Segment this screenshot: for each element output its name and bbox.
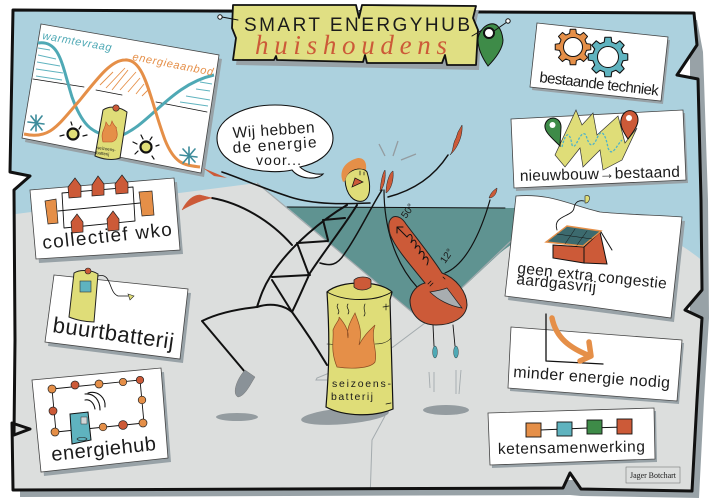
shoe — [235, 370, 255, 397]
icon: house with solar panels — [546, 195, 612, 264]
icon: red pin — [621, 111, 638, 139]
ground shadows — [216, 404, 469, 428]
subtitle text: huishoudens — [255, 30, 447, 60]
left arm and hands — [182, 168, 370, 245]
icon: folded map — [555, 110, 637, 170]
legs — [433, 325, 455, 346]
network of nodes — [48, 376, 147, 436]
logo: Jager Botchart — [626, 467, 680, 483]
label: collectief wko — [41, 219, 173, 254]
legs — [202, 305, 327, 372]
panel: ketensamenwerking — [488, 408, 657, 468]
thermometer character — [384, 188, 497, 394]
houses — [68, 175, 128, 233]
panel: geen extra congestie — [505, 195, 685, 322]
arms — [384, 190, 490, 287]
icon: falling arrow chart — [546, 314, 603, 364]
excitement ticks — [379, 141, 416, 160]
heat storage blocks — [45, 191, 154, 224]
icon: small battery: batterij — [96, 150, 110, 157]
speech bubble: voor... — [256, 152, 301, 168]
right arms — [320, 155, 448, 265]
chart axis lines — [33, 79, 207, 112]
hatched surplus area — [100, 68, 148, 96]
supply curve — [24, 60, 200, 167]
red hands — [380, 125, 462, 193]
chain of coloured squares — [526, 419, 632, 437]
icon: small battery: seizoens- — [97, 145, 117, 153]
figure: person as power pylon — [182, 125, 462, 397]
eyes — [428, 277, 445, 286]
speech bubble — [217, 105, 333, 178]
label: bestaande techniek — [539, 69, 660, 100]
panel: nieuwbouw bestaand — [511, 110, 688, 191]
seasonal battery: batterij — [331, 391, 373, 403]
label: energiehub — [50, 433, 157, 466]
thermometer character: 12° — [438, 247, 456, 266]
icon: green pin — [545, 118, 561, 146]
pylon body — [257, 205, 357, 312]
label line 2: aardgasvrij — [516, 271, 597, 296]
icon: suns — [60, 122, 159, 159]
seasonal battery — [326, 277, 393, 415]
motion lines — [429, 370, 461, 394]
icon: neighbourhood battery — [69, 268, 134, 322]
label: energieaanbod: energieaanbod — [131, 51, 215, 79]
pin: title left hook — [218, 15, 238, 20]
coil and arrow — [397, 227, 428, 265]
flame — [333, 313, 376, 368]
battery label: seizoens- — [332, 378, 392, 390]
panel: buurtbatterij — [45, 268, 191, 363]
speech bubble: de energie — [232, 134, 317, 157]
label: ketensamenwerking — [498, 438, 645, 458]
temperature labels: 50° — [399, 202, 417, 221]
icon: orange gear — [555, 29, 591, 65]
panel: collectief wko — [30, 175, 183, 263]
battery cap — [354, 277, 371, 290]
icon: hub device — [70, 392, 105, 444]
icon: small battery — [95, 105, 127, 159]
label: nieuwbouw→bestaand — [520, 164, 680, 185]
demand curve — [38, 43, 214, 136]
network lines — [58, 187, 140, 228]
label: warmtevraag: warmtevraag — [41, 30, 113, 54]
label: minder energie nodig — [513, 364, 671, 392]
panel: energy chart — [22, 24, 222, 177]
title text: SMART ENERGYHUB — [244, 15, 470, 36]
icon: teal gear — [588, 37, 628, 77]
label: buurtbatterij — [51, 312, 176, 354]
icon: snowflakes — [28, 115, 197, 164]
body — [389, 216, 467, 325]
heat marks — [337, 304, 391, 404]
panel: energiehub — [32, 368, 171, 476]
head — [341, 158, 370, 201]
icon: green map pin — [472, 19, 510, 66]
panel: bestaande techniek — [530, 23, 670, 104]
logo: Jager Botchart: Jager Botchart — [630, 471, 677, 480]
speech text: Wij hebben — [232, 119, 315, 142]
title banner — [218, 5, 481, 70]
label line 1: geen extra congestie — [517, 260, 668, 293]
panel: minder energie nodig — [508, 314, 684, 404]
mouth — [430, 288, 462, 308]
